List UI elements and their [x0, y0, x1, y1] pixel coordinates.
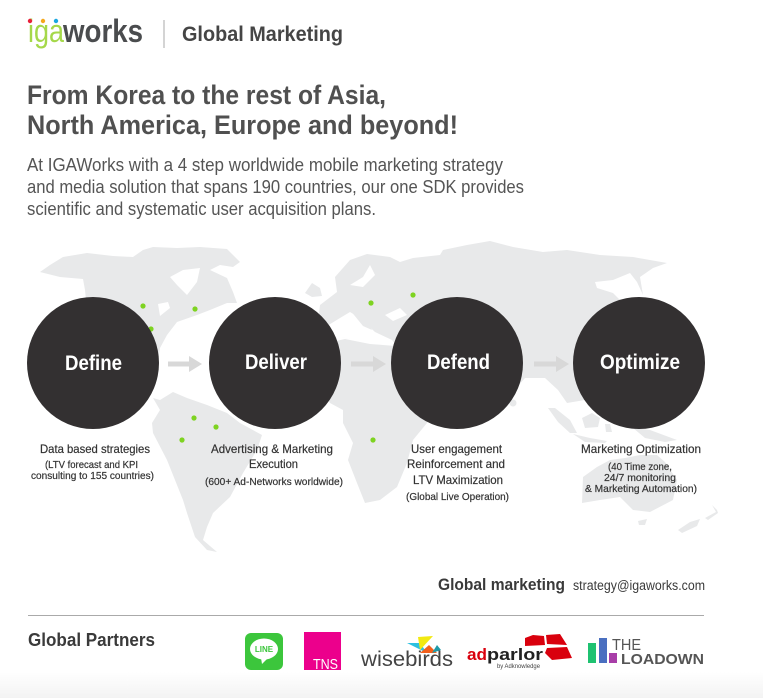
borneo [582, 413, 600, 428]
arrow: define to deliver [168, 356, 202, 372]
africa [312, 339, 455, 503]
logo: igaworks [28, 13, 143, 49]
caption: deliver: Execution [249, 457, 298, 471]
sumatra [548, 408, 577, 433]
logo: LINE: LINE [255, 645, 274, 654]
logo: TNS: TNS [313, 656, 338, 673]
header: Global Marketing: Global Marketing [182, 23, 343, 46]
logo: wisebirds [360, 636, 453, 671]
title: From Korea to the rest of Asia, [27, 80, 386, 110]
black sea [385, 308, 407, 321]
tasmania [638, 519, 647, 525]
logo: adparlor: parlor [487, 645, 543, 664]
step: deliver [209, 297, 341, 429]
caption: optimize: Marketing Optimization [581, 442, 701, 456]
contact line [438, 575, 705, 594]
caption: define: Data based strategies [40, 442, 150, 456]
uk [305, 283, 322, 297]
contact line: strategy@igaworks.com [573, 578, 705, 593]
sri lanka [510, 400, 516, 406]
mediterranean [327, 312, 396, 345]
caption: optimize: & Marketing Automation) [585, 483, 697, 495]
step: deliver: Deliver [245, 351, 307, 374]
arrow: defend to optimize [534, 356, 569, 372]
intro text: At IGAWorks with a 4 step worldwide mobile marketing strategy [27, 155, 503, 175]
arrow: deliver to defend [351, 356, 386, 372]
caption: optimize: (40 Time zone, [608, 461, 672, 473]
baltic [350, 265, 375, 287]
step: defend: Defend [427, 351, 490, 374]
logo: igaworks: works [62, 13, 143, 49]
sulawesi [605, 424, 612, 432]
caption: defend: User engagement [411, 442, 503, 456]
caption: defend: LTV Maximization [413, 473, 503, 487]
green location dots [140, 292, 416, 443]
step: defend [391, 297, 523, 429]
caption: deliver [205, 442, 343, 488]
logo: the loadown: THE [612, 637, 641, 654]
intro text: scientific and systematic user acquisition plans. [27, 199, 376, 219]
step: define [27, 297, 159, 429]
logo: LINE [245, 633, 283, 670]
logo: TNS [304, 632, 341, 673]
heading: global partners: Global Partners [28, 630, 155, 650]
title [27, 80, 458, 140]
caption: define [31, 442, 154, 482]
north america [40, 247, 240, 395]
title: North America, Europe and beyond! [27, 110, 458, 140]
caption: define: consulting to 155 countries) [31, 470, 154, 482]
caption: optimize [581, 442, 701, 495]
step: define: Define [65, 352, 122, 375]
step: optimize [573, 297, 705, 429]
logo: the loadown: LOADOWN [621, 651, 704, 668]
south america [152, 392, 262, 552]
header divider [164, 20, 165, 48]
world map [40, 241, 718, 552]
caption: defend: Reinforcement and [407, 457, 505, 471]
new guinea [633, 428, 677, 442]
step: optimize: Optimize [600, 351, 680, 374]
logo: igaworks: iga [28, 13, 64, 49]
intro text: and media solution that spans 190 countries, our one SDK provides [27, 177, 524, 197]
contact line: Global marketing [438, 575, 565, 594]
logo: adparlor: ad [467, 645, 487, 664]
logo: wisebirds: wisebirds [360, 648, 453, 671]
new zealand [678, 519, 700, 533]
caption: defend [406, 442, 509, 503]
logo: the loadown [588, 637, 704, 668]
logo: adparlor: by Adknowledge [497, 664, 541, 670]
australia [582, 455, 677, 512]
caption: defend: (Global Live Operation) [406, 491, 509, 503]
eurasia [318, 241, 667, 403]
java [573, 434, 607, 443]
intro text [27, 155, 524, 219]
caption: deliver: (600+ Ad-Networks worldwide) [205, 476, 343, 488]
caption: define: (LTV forecast and KPI [45, 459, 138, 471]
caption: optimize: 24/7 monitoring [604, 472, 676, 484]
logo: adparlor [467, 634, 572, 670]
caption: deliver: Advertising & Marketing [211, 442, 333, 456]
hudson bay [170, 268, 200, 295]
